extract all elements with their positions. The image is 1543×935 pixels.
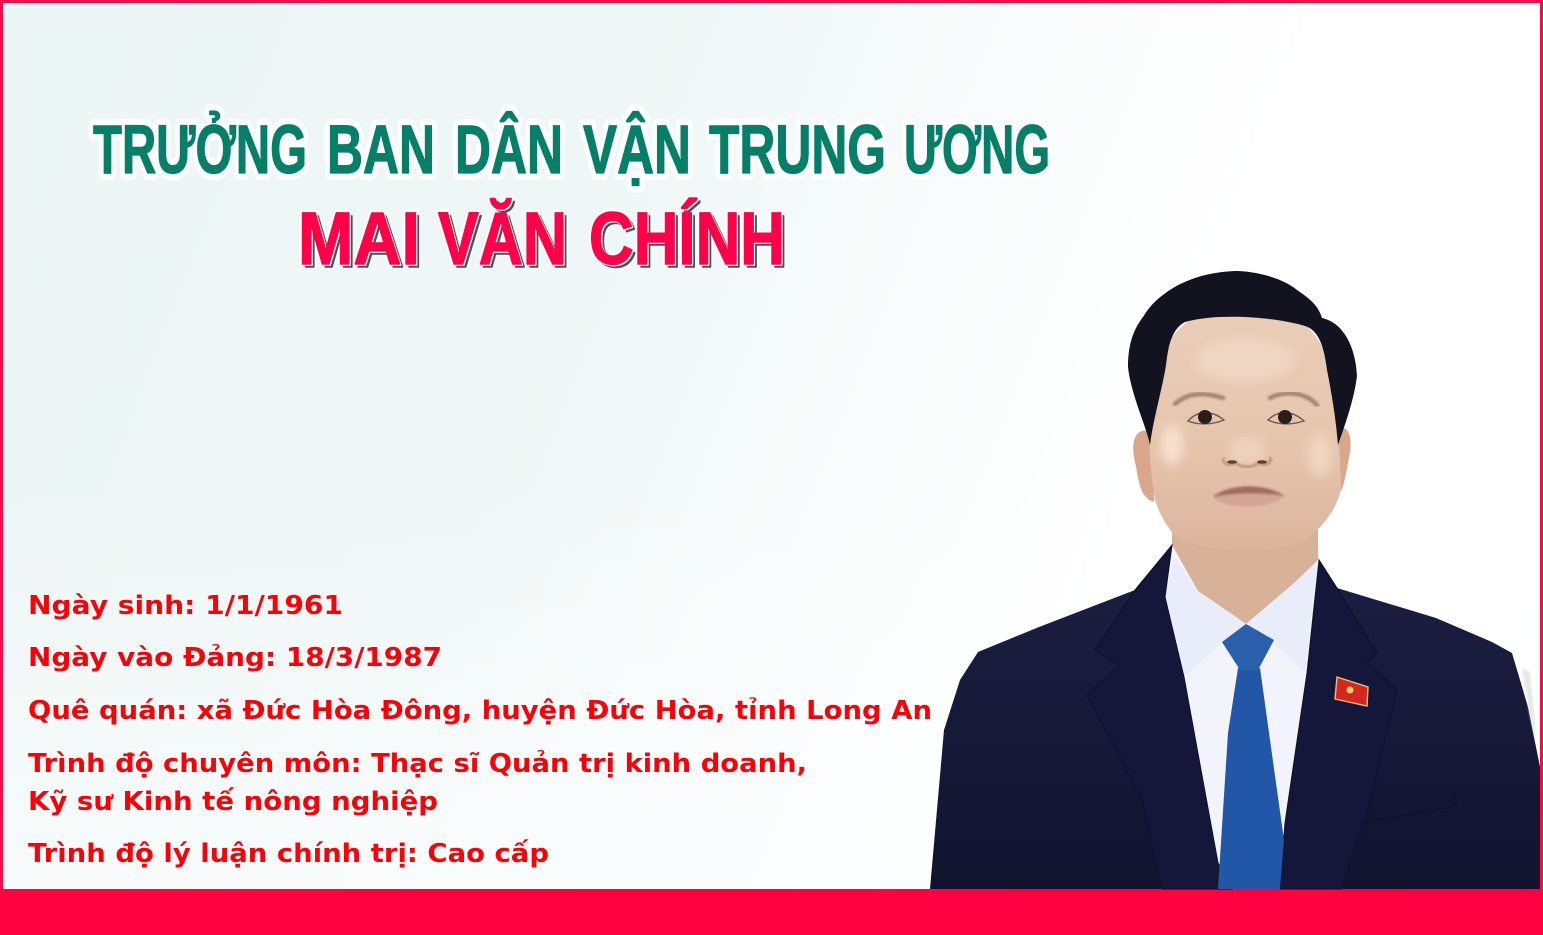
title: position: VẬN	[583, 111, 691, 188]
eyebrows	[1175, 393, 1317, 405]
title: name: CHÍNH	[590, 198, 786, 281]
jacket lapels	[1087, 545, 1397, 889]
title: position: TRUNG	[709, 111, 886, 188]
title: name: CHÍNH	[592, 200, 788, 283]
title: position: BAN	[327, 111, 435, 188]
professional qualification: Trình độ chuyên môn: Thạc sĩ Quản trị kinh doanh,	[28, 748, 807, 779]
title: position: TRUNG	[709, 111, 886, 188]
title: name: MAI	[301, 200, 423, 283]
party pin	[1335, 677, 1368, 706]
grey speckle behind right sleeve	[1522, 668, 1537, 745]
jacket	[930, 545, 1540, 889]
shirt	[1164, 545, 1319, 889]
title: name: VĂN	[439, 198, 568, 281]
title: name: MAI	[298, 197, 420, 280]
title: position: BAN	[327, 111, 435, 188]
nose	[1224, 436, 1270, 467]
face	[1149, 305, 1341, 550]
party admission date: Ngày vào Đảng: 18/3/1987	[28, 642, 442, 673]
title: position: DÂN	[455, 111, 563, 188]
shirt collar shading	[1164, 558, 1317, 677]
title: name: MAI	[299, 198, 421, 281]
bottom red bar	[0, 889, 1543, 935]
political theory level: Trình độ lý luận chính trị: Cao cấp	[28, 838, 549, 869]
necktie	[1218, 624, 1284, 889]
title: position: VẬN	[583, 111, 691, 188]
title: name: VĂN	[441, 200, 570, 283]
mouth	[1213, 486, 1285, 507]
hair	[1128, 271, 1357, 445]
title: name	[298, 197, 788, 283]
title: position	[93, 111, 1050, 188]
biography text block	[28, 591, 932, 869]
title: name: MAI	[298, 197, 420, 280]
jacket pocket	[1366, 785, 1456, 822]
eyes	[1188, 410, 1304, 424]
title: name: CHÍNH	[589, 197, 785, 280]
neck	[1172, 505, 1318, 624]
title: position: ƯƠNG	[904, 111, 1050, 188]
title: position: DÂN	[455, 111, 563, 188]
face highlights	[1161, 338, 1332, 477]
hometown: Quê quán: xã Đức Hòa Đông, huyện Đức Hòa, tỉnh Long An	[28, 696, 932, 726]
title: position: ƯƠNG	[904, 111, 1050, 188]
portrait illustration	[930, 271, 1540, 889]
professional qualification: Kỹ sư Kinh tế nông nghiệp	[28, 786, 438, 817]
title: name: VĂN	[438, 197, 567, 280]
title: position: TRƯỞNG	[93, 111, 307, 188]
date of birth: Ngày sinh: 1/1/1961	[28, 591, 343, 621]
title: name: VĂN	[438, 197, 567, 280]
title: name: CHÍNH	[589, 197, 785, 280]
professional qualification	[28, 748, 807, 817]
title: position: TRƯỞNG	[93, 111, 307, 188]
ears	[1133, 427, 1351, 502]
